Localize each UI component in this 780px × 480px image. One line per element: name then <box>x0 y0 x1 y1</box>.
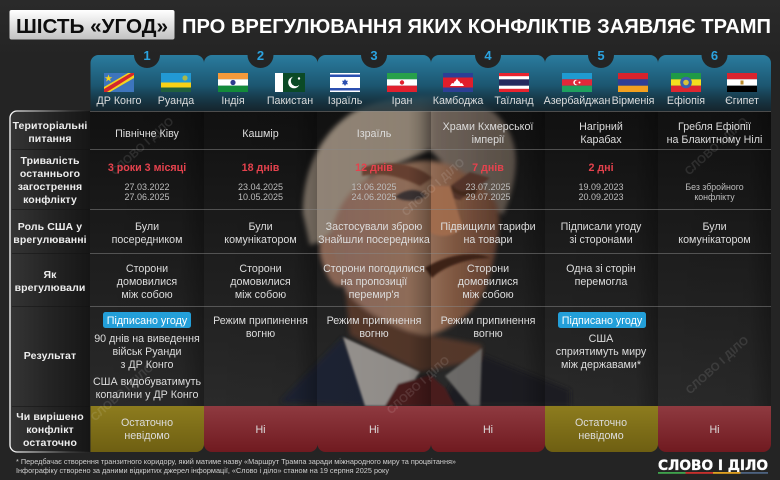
row label panel: загострення <box>18 181 82 193</box>
tab 6: Ethiopia and Egypt: Єгипет <box>725 95 759 107</box>
bottom status row <box>90 406 771 452</box>
row: US role: Підвищили тарифи <box>440 221 536 233</box>
tab 2: India and Pakistan: Індія <box>221 95 245 107</box>
row: duration of last escalation: 7 днів <box>472 162 504 174</box>
row: how settled: домовилися <box>458 276 518 288</box>
row: territorial issue: на Блакитному Нілі <box>667 134 762 146</box>
tab 5: Azerbaijan and Armenia: 5 <box>597 48 605 63</box>
row: how settled: між собою <box>235 289 286 301</box>
tab 3: Israel and Iran: Іран <box>392 95 412 107</box>
row: duration of last escalation: 12 днів <box>355 162 393 174</box>
row: how settled: Сторони <box>239 263 282 275</box>
row: result: сприятимуть миру <box>556 346 647 358</box>
row label panel: питання <box>28 133 72 145</box>
status: column 6 <box>658 406 771 452</box>
status: column 3 <box>318 406 431 452</box>
watermarks: СЛОВО І ДІЛО <box>684 334 751 397</box>
row: territorial issue: імперії <box>472 134 504 146</box>
tab 2: India and Pakistan: Пакистан <box>267 95 313 107</box>
row: result: США видобуватимуть <box>93 376 201 388</box>
row: duration of last escalation: 20.09.2023 <box>578 192 624 202</box>
row: duration of last escalation: 23.07.2025 <box>465 182 511 192</box>
tab 6: Ethiopia and Egypt: Ефіопія <box>667 95 705 107</box>
flag: Ethiopia <box>671 73 701 92</box>
row label panel: конфлікт <box>26 424 74 436</box>
status: column 2: Ні <box>255 424 266 436</box>
row: US role: посередником <box>112 234 182 246</box>
status: column 3: Ні <box>369 424 379 436</box>
row: result: Режим припинення <box>213 315 308 327</box>
row: duration of last escalation <box>108 162 744 202</box>
tab 3: Israel and Iran <box>318 48 431 111</box>
row: how settled: Сторони <box>126 263 168 275</box>
row: how settled: перемогла <box>575 276 627 288</box>
row label panel: врегулювали <box>15 282 85 294</box>
flag: Thailand <box>499 73 529 92</box>
row: result: між державами* <box>561 359 641 371</box>
tab 5: Azerbaijan and Armenia: Азербайджан <box>544 95 611 107</box>
row: duration of last escalation: 24.06.2025 <box>351 192 397 202</box>
flag: DR Congo <box>104 73 134 92</box>
row: result: Режим припинення <box>441 315 536 327</box>
row: US role: комунікатором <box>224 234 297 246</box>
watermarks: СЛОВО І ДІЛО <box>400 156 467 219</box>
row: result: 90 днів на виведення <box>94 333 200 345</box>
watermarks: СЛОВО І ДІЛО <box>683 115 750 178</box>
row: how settled: на пропозиції <box>341 276 407 288</box>
watermarks <box>89 115 751 424</box>
row: duration of last escalation: 27.03.2022 <box>124 182 170 192</box>
tab 6: Ethiopia and Egypt: 6 <box>711 48 718 63</box>
flag: Armenia <box>618 73 648 92</box>
status: column 5: невідомо <box>578 430 624 442</box>
tab 1: DR Congo and Rwanda: Руанда <box>158 95 194 107</box>
tab 3: Israel and Iran: Ізраїль <box>328 95 363 107</box>
watermarks: СЛОВО І ДІЛО <box>109 115 176 178</box>
header tabs <box>90 48 771 111</box>
flag: India <box>218 73 248 92</box>
tab 6: Ethiopia and Egypt <box>658 48 771 111</box>
row: result: вогню <box>473 328 503 340</box>
row label panel: Територіальні <box>13 120 87 132</box>
flag: Azerbaijan <box>562 73 592 92</box>
row: US role: Були <box>248 221 273 233</box>
tab 5: Azerbaijan and Armenia: Вірменія <box>612 95 655 107</box>
row: result: військ Руанди <box>113 346 182 358</box>
row: duration of last escalation: 13.06.2025 <box>351 182 397 192</box>
row label panel: конфлікту <box>23 194 77 206</box>
footnote: * Передбачає створення транзитного коридору, який матиме назву «Маршрут Трампа заради міжнародного миру та процвітання» <box>16 457 456 466</box>
title text: ПРО ВРЕГУЛЮВАННЯ ЯКИХ КОНФЛІКТІВ ЗАЯВЛЯЄ ТРАМП <box>182 15 771 38</box>
row: how settled: Сторони погодилися <box>323 263 425 275</box>
row: how settled: перемир'я <box>349 289 400 301</box>
footnote: Інфографіку створено за даними відкритих джерел інформації, «Слово і діло» станом на 19 серпня 2025 року <box>16 466 389 475</box>
flag: Iran <box>387 73 417 92</box>
badge: agreement signed, column 5 <box>558 312 646 328</box>
row label panel: Чи вирішено <box>16 411 84 423</box>
row: territorial issue: Кашмір <box>242 128 279 140</box>
row: US role: на товари <box>464 234 513 246</box>
row: territorial issue: Ізраїль <box>357 128 392 140</box>
tab 5: Azerbaijan and Armenia <box>544 48 658 111</box>
tab 1: DR Congo and Rwanda <box>90 48 204 111</box>
row label panel: врегулюванні <box>13 234 87 246</box>
row: result: США <box>589 333 614 345</box>
watermarks: СЛОВО І ДІЛО <box>89 361 156 424</box>
row: duration of last escalation: конфлікту <box>694 192 735 202</box>
row: result <box>93 312 647 401</box>
row label panel: Роль США у <box>18 221 82 233</box>
badge: agreement signed, column 1 <box>103 312 191 328</box>
row: result: вогню <box>359 328 389 340</box>
row: how settled: домовилися <box>117 276 177 288</box>
status: column 6: Ні <box>709 424 720 436</box>
tab 4: Cambodia and Thailand: 4 <box>484 48 492 63</box>
title <box>10 10 771 40</box>
row: result: з ДР Конго <box>121 359 173 371</box>
badge: agreement signed, column 5: Підписано угоду <box>562 315 643 327</box>
column shading <box>90 111 771 406</box>
flag: Cambodia <box>443 73 473 92</box>
status: column 5: Остаточно <box>575 417 627 429</box>
flag: Egypt <box>727 73 757 92</box>
row: US role: Підписали угоду <box>561 221 642 233</box>
row label panel: Як <box>43 269 57 281</box>
row: territorial issue: Північне Ківу <box>115 128 180 140</box>
row: duration of last escalation: Без збройного <box>685 182 744 192</box>
status: column 4: Ні <box>483 424 493 436</box>
row label panel: Результат <box>24 350 76 362</box>
status: column 1 <box>90 406 204 452</box>
row: territorial issue: Карабах <box>580 134 622 146</box>
flag: Rwanda <box>161 73 191 92</box>
status: column 1: невідомо <box>124 430 170 442</box>
tab 2: India and Pakistan: 2 <box>257 48 264 63</box>
tab 4: Cambodia and Thailand: Камбоджа <box>433 95 483 107</box>
row: US role: Знайшли посередника <box>318 234 430 246</box>
status: column 5 <box>545 406 658 452</box>
tab 2: India and Pakistan <box>204 48 318 111</box>
row label panel <box>10 111 90 452</box>
tab 4: Cambodia and Thailand <box>431 48 545 111</box>
row: how settled: домовилися <box>230 276 291 288</box>
table body background <box>90 111 771 406</box>
row: US role: зі сторонами <box>569 234 633 246</box>
row: how settled: Одна зі сторін <box>566 263 636 275</box>
logo: СЛОВО І ДІЛО <box>658 458 768 474</box>
row: territorial issue: Гребля Ефіопії <box>678 121 751 133</box>
tab 1: DR Congo and Rwanda: ДР Конго <box>96 95 142 107</box>
row: US role: Були <box>135 221 159 233</box>
row: duration of last escalation: 3 роки 3 місяці <box>108 162 186 174</box>
row: duration of last escalation: 27.06.2025 <box>124 192 170 202</box>
row: duration of last escalation: 2 дні <box>588 162 614 174</box>
flag: Israel <box>330 73 360 92</box>
status: column 1: Остаточно <box>121 417 173 429</box>
row label panel: остаточно <box>23 437 77 449</box>
row: how settled <box>117 263 636 301</box>
tab 1: DR Congo and Rwanda: 1 <box>143 48 151 63</box>
status: column 4 <box>431 406 545 452</box>
watermarks: СЛОВО І ДІЛО <box>385 354 452 417</box>
row: how settled: Сторони <box>467 263 509 275</box>
tab 3: Israel and Iran: 3 <box>370 48 378 63</box>
row: result: вогню <box>246 328 275 340</box>
tab 4: Cambodia and Thailand: Таїланд <box>494 95 534 107</box>
badge: agreement signed, column 1: Підписано угоду <box>107 315 188 327</box>
row: how settled: між собою <box>121 289 173 301</box>
title highlight box: ШІСТЬ «УГОД» <box>16 15 168 38</box>
footnote <box>16 457 456 475</box>
row: territorial issue: Храми Кхмерської <box>443 121 533 133</box>
flag: Pakistan <box>275 73 305 92</box>
row: US role: комунікатором <box>678 234 751 246</box>
row: duration of last escalation: 10.05.2025 <box>238 192 283 202</box>
row: territorial issue <box>115 121 762 146</box>
row: US role: Застосували зброю <box>326 221 422 233</box>
row: US role: Були <box>702 221 727 233</box>
portrait photo <box>280 96 570 406</box>
row: duration of last escalation: 29.07.2025 <box>465 192 511 202</box>
row: how settled: між собою <box>462 289 514 301</box>
row: duration of last escalation: 18 днів <box>242 162 280 174</box>
row label panel: Тривалість <box>20 155 80 167</box>
row: duration of last escalation: 19.09.2023 <box>578 182 624 192</box>
row label panel: останнього <box>20 168 80 180</box>
row: US role <box>112 221 751 246</box>
row: duration of last escalation: 23.04.2025 <box>238 182 283 192</box>
row: result: Режим припинення <box>327 315 422 327</box>
row: result: копалини у ДР Конго <box>96 389 198 401</box>
row: territorial issue: Нагірний <box>579 121 623 133</box>
status: column 2 <box>204 406 318 452</box>
